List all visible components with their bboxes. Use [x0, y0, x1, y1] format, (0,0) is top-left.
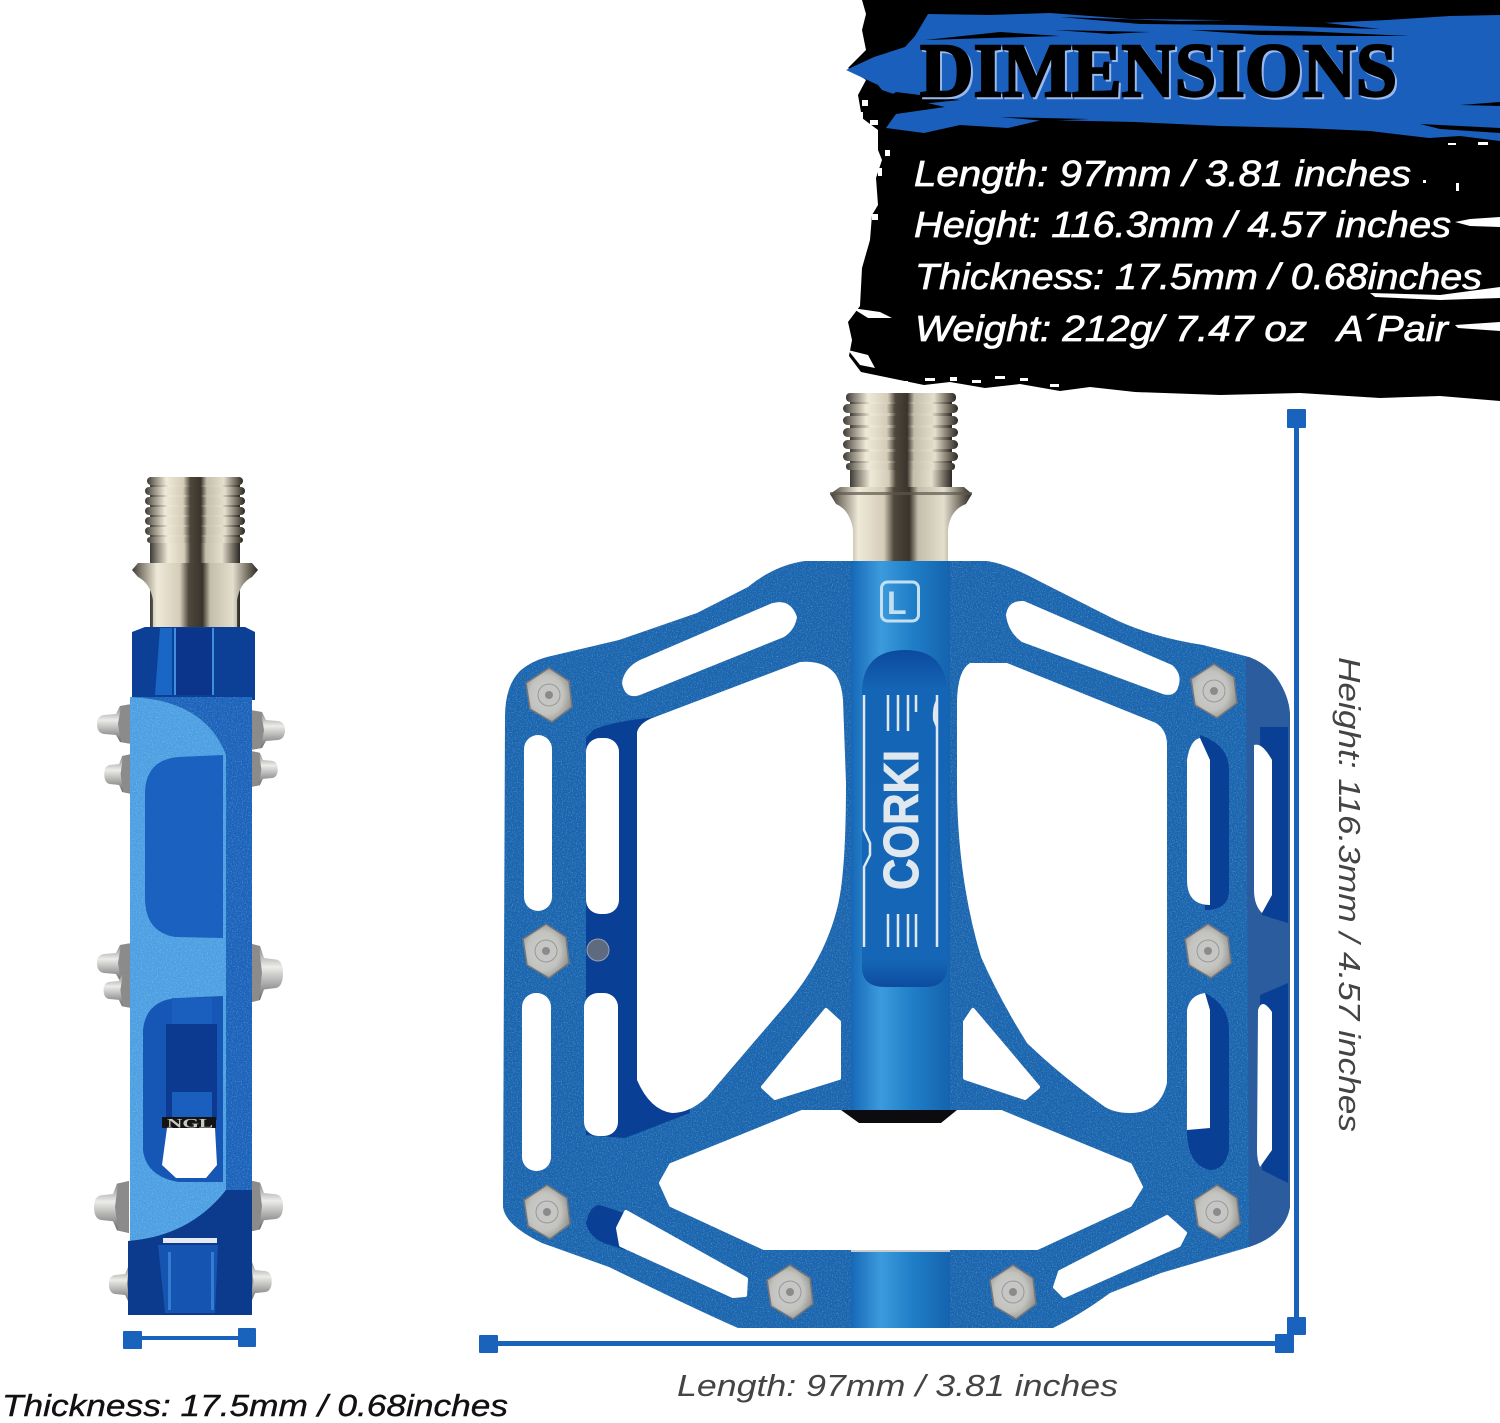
side pedal: profile view	[94, 477, 285, 1315]
side window upper	[145, 755, 223, 938]
recessed logo pocket	[862, 650, 947, 987]
spec: length: Length: 97mm / 3.81 inches	[914, 153, 1411, 194]
side window lower	[143, 996, 223, 1182]
white distressed marks	[848, 100, 1500, 387]
spec list	[914, 153, 1482, 349]
dimension line: thickness	[123, 1328, 256, 1349]
pedal body	[503, 561, 1290, 1328]
spec: weight unit: A´Pair	[1335, 308, 1450, 349]
dimension line: height	[1287, 409, 1306, 1335]
label: thickness: Thickness: 17.5mm / 0.68inches	[2, 1388, 508, 1423]
side hub text	[162, 1116, 216, 1130]
heading: dimensions: DIMENSIONS	[920, 29, 1397, 113]
front pedal: main top view	[503, 393, 1290, 1328]
label: height: Height: 116.3mm / 4.57 inches	[1332, 657, 1367, 1132]
side light face	[130, 697, 226, 1242]
side top dark section	[132, 627, 255, 700]
hub end cap	[841, 1110, 957, 1123]
spec: weight: Weight: 212g/ 7.47 oz	[915, 308, 1307, 349]
lower spindle bar	[851, 1250, 950, 1328]
side bolts	[94, 704, 285, 1304]
size badge L: L	[887, 585, 907, 621]
panel: dimensions banner	[846, 0, 1500, 401]
right side wall	[1246, 657, 1290, 1247]
side lower dark section	[128, 1190, 252, 1315]
dimension line: length	[479, 1334, 1294, 1353]
side slots	[522, 735, 1272, 1171]
axle: threaded spindle	[830, 393, 972, 562]
brand logo: CORKI: CORKI	[875, 750, 929, 890]
brand logo: CORKI	[864, 695, 937, 947]
size badge L	[882, 582, 918, 621]
bolt: left gap pin	[587, 939, 609, 961]
brush streaks	[884, 17, 1500, 133]
label: length: Length: 97mm / 3.81 inches	[677, 1368, 1118, 1403]
white cut-outs	[618, 601, 1185, 1296]
side axle	[132, 477, 258, 627]
dark inner walls	[586, 717, 1288, 1250]
side body	[130, 697, 252, 1242]
side hole	[162, 1128, 217, 1178]
bearing rim highlight	[851, 1250, 950, 1252]
centre spindle bar	[851, 561, 950, 1110]
spec: height: Height: 116.3mm / 4.57 inches	[914, 204, 1451, 245]
side hub text: NGL	[167, 1116, 214, 1130]
pedal pins	[523, 664, 1240, 1319]
black brush background	[848, 0, 1500, 401]
spec: thickness: Thickness: 17.5mm / 0.68inches	[915, 256, 1482, 297]
blue brush stroke	[846, 13, 1500, 141]
